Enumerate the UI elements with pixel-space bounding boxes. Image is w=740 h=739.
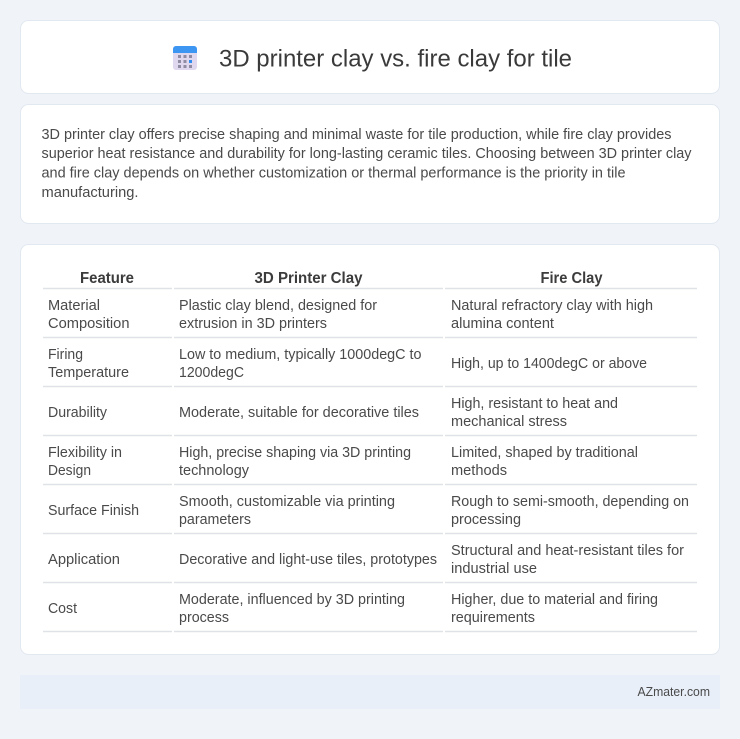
row: firing temperature: Low to medium, typically 1000degC to [179, 347, 422, 363]
row: durability: Moderate, suitable for decorative tiles [179, 405, 419, 421]
row: cost: Moderate, influenced by 3D printing [179, 592, 405, 608]
row: flexibility in design: Design [48, 463, 91, 479]
row: material composition [48, 298, 653, 332]
table header [80, 270, 603, 287]
panel: summary [20, 104, 720, 224]
row: surface finish: parameters [179, 512, 251, 528]
text block: summary paragraph: manufacturing. [42, 185, 138, 201]
row: firing temperature: 1200degC [179, 365, 244, 381]
row: cost: Cost [48, 601, 77, 617]
row: flexibility in design: Limited, shaped by traditional [451, 445, 638, 461]
row: material composition: extrusion in 3D printers [179, 316, 327, 332]
row: firing temperature: Firing [48, 347, 83, 363]
icon: calendar grid [173, 46, 197, 70]
row: cost: process [179, 610, 229, 626]
row: material composition: Material [48, 298, 100, 314]
footer credit: AZmater.com [638, 685, 710, 699]
row: flexibility in design: Flexibility in [48, 445, 122, 461]
row: material composition: Natural refractory clay with high [451, 298, 653, 314]
row: surface finish [48, 494, 689, 528]
row: application: Application [48, 552, 120, 568]
row: durability: mechanical stress [451, 414, 567, 430]
text block: summary paragraph: 3D printer clay offers precise shaping and minimal waste for tile production, while fire clay provides [42, 127, 672, 143]
text block: summary paragraph [42, 127, 692, 201]
row: firing temperature [48, 347, 647, 381]
row: application: industrial use [451, 561, 537, 577]
panel: title card [20, 20, 720, 94]
row: surface finish: Surface Finish [48, 503, 139, 519]
row: firing temperature: Temperature [48, 365, 129, 381]
row: surface finish: Rough to semi-smooth, depending on [451, 494, 689, 510]
row: cost: Higher, due to material and firing [451, 592, 658, 608]
text block: summary paragraph: and fire clay depends on whether customization or thermal performance is the priority in tile [42, 166, 626, 182]
row: material composition: Plastic clay blend, designed for [179, 298, 377, 314]
table header: Feature [80, 270, 134, 287]
row: application [48, 543, 684, 577]
row: material composition: Composition [48, 316, 130, 332]
row: cost: requirements [451, 610, 535, 626]
row: cost [48, 592, 658, 626]
row: durability [48, 396, 618, 430]
table header: 3D Printer Clay [254, 270, 363, 287]
text block: summary paragraph: superior heat resistance and durability for long-lasting ceramic tiles. Choosing between 3D printer clay [42, 146, 692, 162]
row: firing temperature: High, up to 1400degC or above [451, 356, 647, 372]
row: surface finish: Smooth, customizable via printing [179, 494, 395, 510]
row: durability: High, resistant to heat and [451, 396, 618, 412]
footer bar [20, 675, 720, 709]
row: application: Structural and heat-resistant tiles for [451, 543, 684, 559]
row: surface finish: processing [451, 512, 521, 528]
table header: Fire Clay [540, 270, 603, 287]
row: flexibility in design [48, 445, 638, 479]
row: flexibility in design: technology [179, 463, 250, 479]
title: 3D printer clay vs. fire clay for tile [219, 46, 572, 72]
row: material composition: alumina content [451, 316, 554, 332]
row: flexibility in design: methods [451, 463, 507, 479]
row: flexibility in design: High, precise shaping via 3D printing [179, 445, 411, 461]
row: application: Decorative and light-use tiles, prototypes [179, 552, 437, 568]
row: durability: Durability [48, 405, 108, 421]
panel: comparison table [20, 244, 720, 654]
